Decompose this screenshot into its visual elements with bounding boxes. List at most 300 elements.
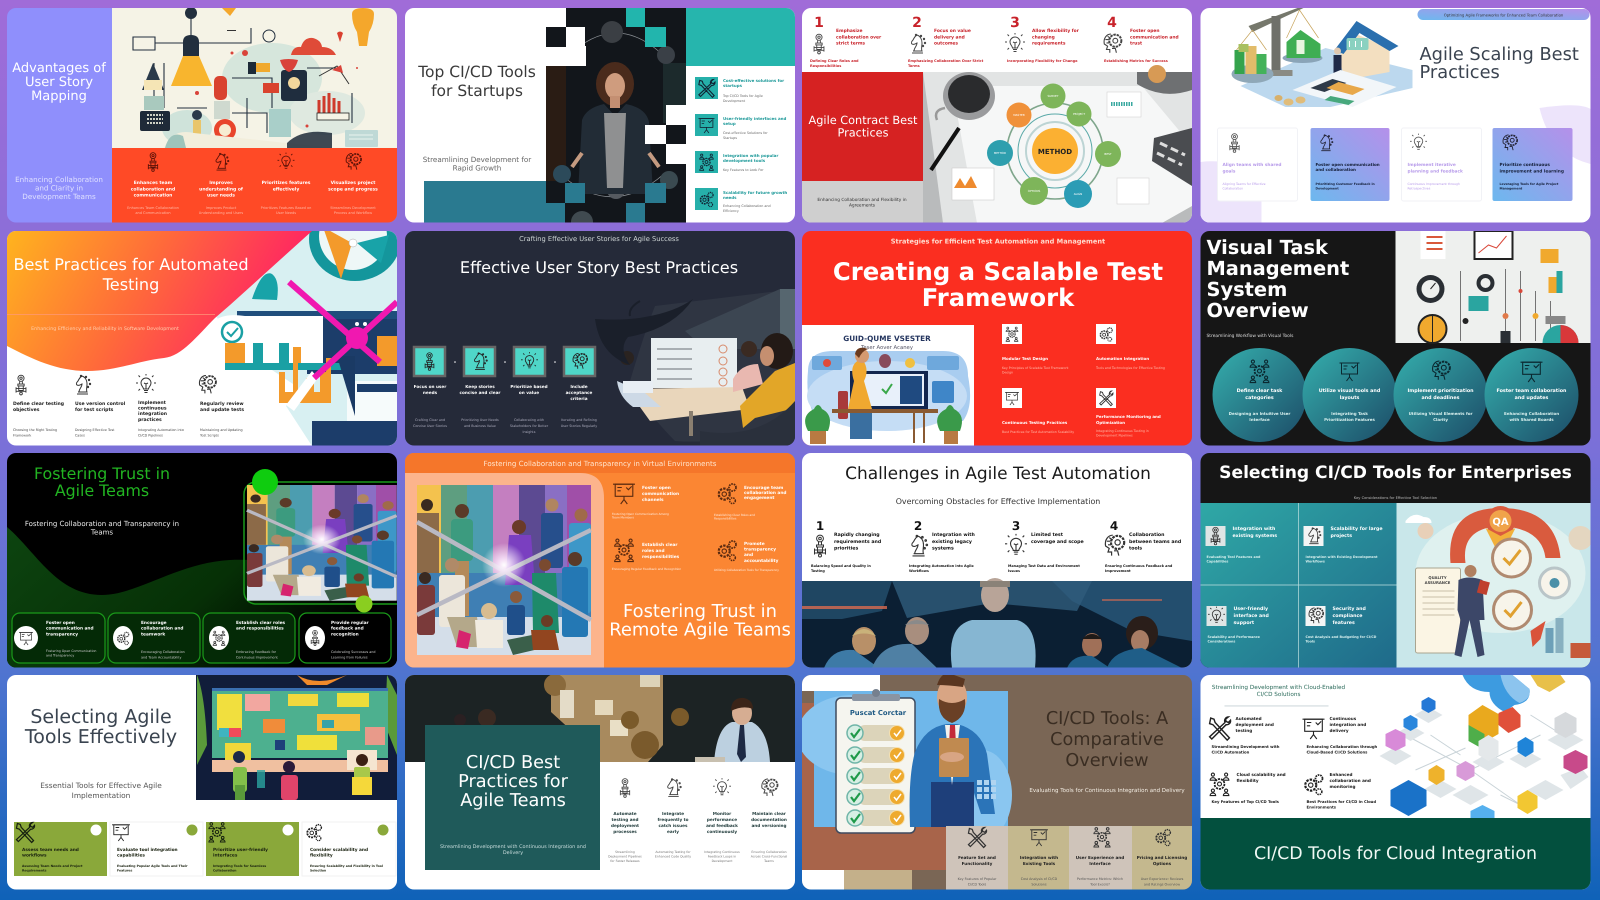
item 1	[695, 77, 784, 103]
item 4: Regularly review	[200, 401, 244, 407]
card 1: Requirements	[22, 868, 47, 872]
feature 4	[328, 153, 378, 215]
teal panel	[1200, 503, 1396, 668]
item 4	[199, 376, 244, 438]
feature 3: Best Practices for Test Automation Scalability	[1002, 430, 1074, 434]
item 3: Integration with popular	[723, 153, 778, 158]
feature 2: Understanding and Users	[199, 211, 243, 215]
item 1: Emphasize	[836, 28, 862, 34]
card 2	[1310, 128, 1390, 201]
circle 1: Define clear task	[1237, 388, 1283, 394]
feature 1: Design	[1002, 371, 1013, 375]
item 2	[695, 114, 787, 140]
step 1	[413, 347, 447, 428]
subtitle: Fostering Collaboration and Transparency in	[25, 520, 179, 528]
item 4: Enhanced	[1330, 772, 1352, 777]
card 1: communication and	[46, 626, 94, 632]
title: Overview	[1065, 751, 1149, 771]
item 3: 3	[1010, 15, 1020, 31]
column 4	[1132, 826, 1192, 890]
card 4	[302, 822, 396, 876]
item 1: Evaluating Tool Features and	[1206, 555, 1261, 559]
circle 2: Integrating Task	[1331, 411, 1368, 416]
feature 2: engagement	[744, 495, 774, 501]
item 1: 1	[816, 519, 824, 533]
title: Overview	[1206, 299, 1309, 322]
item 4: communication and	[1130, 34, 1179, 40]
slide: Top CI/CD Tools for Startups	[405, 8, 795, 233]
slide: Best Practices for Automated Testing	[7, 231, 397, 446]
feature 1	[1002, 324, 1069, 375]
feature 2	[714, 484, 786, 520]
step 3: Collaborating with	[514, 418, 544, 422]
item 3: Scalability and Performance	[1208, 635, 1261, 639]
item 4: needs	[723, 195, 737, 200]
item 2: systems	[932, 546, 954, 552]
item 3: Limited test	[1031, 532, 1064, 538]
item 3: practices	[138, 417, 162, 423]
column 1	[946, 826, 1008, 890]
step 1: Focus on user	[414, 384, 447, 389]
slide: Agile Contract Best Practices	[802, 8, 1192, 223]
subtitle: Teams	[90, 528, 113, 536]
photo: woman with network	[546, 8, 686, 233]
top text: Streamlining Development with Cloud-Enabled	[1212, 684, 1345, 691]
item 1: Capabilities	[1206, 560, 1228, 564]
item 2: Enhancing Collaboration through	[1306, 744, 1378, 749]
card 2: Encouraging Collaboration	[141, 650, 185, 654]
item 4	[1105, 519, 1181, 573]
card 4: flexibility	[310, 853, 333, 859]
feature 2: Encourage team	[744, 485, 784, 491]
photo: team with holographic screens	[802, 578, 1192, 668]
item 4: collaboration and	[1330, 778, 1371, 783]
step 2: Keep stories	[465, 384, 495, 389]
item 1: Testing	[811, 569, 825, 573]
card 3: Continuous Improvement through	[1408, 182, 1460, 186]
item 4	[695, 188, 787, 213]
gray subtitle panel	[802, 181, 923, 223]
circle 3: Clarity	[1433, 417, 1448, 422]
item 4: Scalability for future growth	[723, 190, 787, 195]
step 2: Prioritizing User Needs	[461, 418, 499, 422]
step 1: Concise User Stories	[413, 424, 447, 428]
item 1: testing and	[611, 817, 639, 822]
title: Selecting Agile	[30, 706, 172, 728]
item 4: documentation	[751, 817, 787, 822]
column 3	[1069, 826, 1132, 890]
card 1: Fostering Open Communication	[46, 649, 96, 653]
card 1: workflows	[22, 853, 47, 859]
item 2	[909, 519, 975, 573]
item 1: Defining Clear Roles and	[810, 59, 859, 63]
feature 3	[261, 153, 311, 215]
item 3	[1005, 15, 1080, 63]
photo frame with team	[244, 469, 414, 612]
item 1: Balancing Speed and Quality in	[811, 564, 871, 568]
card 3: Prioritize user-friendly	[213, 847, 268, 853]
item 2: 2	[912, 15, 922, 31]
subtitle pill: Optimizing Agile Frameworks for Enhanced Team Collaboration	[1444, 12, 1564, 18]
item 1	[608, 779, 642, 863]
top band	[405, 453, 795, 473]
item 3: 3	[1012, 519, 1020, 533]
card 2	[110, 822, 203, 876]
step 2	[460, 347, 501, 428]
circle 4	[1484, 348, 1578, 442]
title: Practices for	[458, 772, 569, 792]
item 3: Integrating Continuous	[704, 850, 740, 854]
slide: Selecting CI/CD Tools for Enterprises	[1200, 453, 1592, 668]
column 3: Interface	[1089, 861, 1111, 866]
feature 2: Automation Integration	[1096, 356, 1149, 361]
item 1: deployment	[611, 823, 639, 828]
feature 3: Prioritizes features	[262, 180, 311, 186]
illustration: dashboards with pink cross	[212, 197, 401, 446]
subtitle: Delivery	[503, 850, 523, 856]
item 3: Monitor	[713, 811, 732, 816]
item 1: strict terms	[836, 41, 865, 47]
step 3: on value	[519, 390, 539, 395]
subtitle: Development Teams	[22, 192, 96, 201]
item 2: 2	[914, 519, 922, 533]
item 1: processes	[613, 829, 637, 834]
card 4: Leveraging Tools for Agile Project	[1500, 182, 1559, 186]
step 1: needs	[423, 390, 438, 395]
item 2: for test scripts	[75, 407, 114, 413]
item 2: projects	[1330, 533, 1352, 539]
circle 4: Enhancing Collaboration	[1504, 411, 1559, 416]
feature 3: effectively	[273, 186, 299, 192]
item 4: and versioning	[751, 823, 787, 828]
item 3: continuous	[138, 406, 167, 412]
illustration: scales and house	[1232, 8, 1412, 107]
item 1: Responsibilities	[810, 64, 841, 68]
circle 1: categories	[1245, 395, 1274, 401]
feature 4: and	[744, 552, 753, 558]
card 2: Encourage	[141, 620, 167, 626]
item 4: between teams and	[1129, 539, 1181, 545]
item 1: Streamlining	[615, 850, 635, 854]
card 1: goals	[1222, 168, 1236, 174]
item 4: Foster open	[1130, 28, 1159, 34]
slide: Selecting Agile Tools Effectively	[7, 675, 397, 890]
column 4: User Experience: Reviews	[1141, 877, 1184, 881]
step 4: acceptance	[566, 390, 593, 395]
title: Effective User Story Best Practices	[460, 258, 738, 277]
item 3: Cloud scalability and	[1236, 772, 1286, 777]
item 1: collaboration over	[836, 34, 882, 40]
item 1: deployment and	[1236, 722, 1274, 727]
item 2: setup	[723, 121, 736, 126]
item 2: Integrate	[662, 811, 684, 816]
column 4: and Ratings Overview	[1144, 882, 1180, 886]
card 1: Assess team needs and	[22, 847, 79, 853]
feature 2	[199, 153, 243, 215]
item 4: Cost Analysis and Budgeting for CI/CD	[1306, 635, 1377, 639]
column 1: CI/CD Tools	[968, 882, 986, 886]
item 2: catch issues	[659, 823, 688, 828]
item 4: Maintain clear	[752, 811, 787, 816]
item 1	[810, 15, 882, 68]
item 3: Development	[712, 859, 733, 863]
card 3: interfaces	[213, 853, 238, 859]
title: Fostering Trust in	[34, 464, 170, 483]
title: Practices	[1420, 62, 1500, 83]
feature 4	[714, 541, 779, 572]
subtitle: Agreements	[849, 202, 876, 208]
card 3	[203, 613, 295, 663]
column 2: Solutions	[1031, 882, 1047, 886]
card 1: Align teams with shared	[1222, 162, 1281, 168]
subtitle: Streamlining Development with Continuous Integration and	[440, 844, 586, 850]
item 4: Establishing Metrics for Success	[1104, 59, 1168, 63]
item 4: 4	[1107, 15, 1117, 31]
green wave	[7, 527, 397, 668]
item 2: Cloud-Based CI/CD Solutions	[1306, 750, 1368, 754]
teal corner	[686, 8, 795, 66]
item 2: Emphasizing Collaboration Over Strict	[908, 59, 984, 63]
item 2: Terms	[908, 64, 920, 68]
title: Challenges in Agile Test Automation	[845, 464, 1151, 484]
feature 1: Modular Test Design	[1002, 356, 1048, 361]
top text: Fostering Collaboration and Transparency in Virtual Environments	[484, 459, 717, 468]
photo: method diagram on desk	[923, 65, 1192, 223]
title: Practices	[837, 126, 889, 140]
feature 2: user needs	[207, 193, 235, 199]
photo: team with gear sculpture	[405, 674, 795, 762]
item 2: Enhanced Code Quality	[655, 854, 691, 858]
feature 4: Streamlines Development	[330, 206, 376, 210]
illustration: tester at desk: GUID-QUME VSESTER	[843, 334, 931, 343]
illustration: tester at desk: Teser Aover Acaney	[860, 345, 913, 351]
illustration: tester at desk	[802, 325, 974, 446]
subtitle: and Clarity in	[35, 184, 83, 192]
card 1: Assessing Team Needs and Project	[22, 864, 83, 868]
item 4: Best Practices for CI/CD in Cloud	[1306, 799, 1376, 804]
item 4: Across Cross-Functional	[751, 854, 787, 858]
feature 4: Visualizes project	[331, 180, 376, 186]
subtitle: Overcoming Obstacles for Effective Implementation	[896, 497, 1100, 506]
step 3: Insights	[523, 430, 536, 434]
subtitle: Key Considerations for Effective Tool Selection	[1354, 496, 1437, 500]
item 2: Integration with	[932, 532, 975, 538]
item 2: frequently to	[657, 817, 689, 822]
slide: Advantages of User Story Mapping	[7, 7, 397, 223]
item 2: delivery	[1330, 728, 1349, 733]
item 2: User-friendly interfaces and	[723, 116, 787, 121]
top text: CI/CD Solutions	[1257, 691, 1300, 698]
item 3: integration	[138, 411, 167, 417]
gradient wave shape	[7, 231, 312, 371]
card 1: Foster open	[46, 620, 75, 626]
top text: Crafting Effective User Stories for Agile Success	[519, 235, 679, 243]
card 3: Continuous Improvement	[236, 656, 279, 660]
column 3: Tool Excels?	[1089, 882, 1110, 886]
divider	[1224, 704, 1328, 707]
column 3: User Experience and	[1076, 855, 1124, 860]
item 3: Implement	[138, 400, 167, 406]
slide: Fostering Trust in Agile Teams	[7, 453, 414, 668]
item 4	[751, 779, 787, 863]
slide: Challenges in Agile Test Automation	[802, 453, 1192, 668]
card 4: Provide regular	[331, 620, 370, 626]
slide: CI/CD Best Practices for Agile Teams	[405, 674, 795, 890]
subtitle: Implementation	[72, 791, 131, 800]
illustration: machine collage	[112, 7, 397, 148]
feature 1: Foster open	[642, 485, 671, 491]
item 3: support	[1234, 620, 1255, 626]
item 2: Designing Effective Test	[75, 428, 115, 432]
subtitle: Evaluating Tools for Continuous Integration and Delivery	[1029, 787, 1185, 794]
item 3: performance	[707, 817, 737, 822]
step 4	[561, 347, 597, 428]
feature 2: Responsibilities	[714, 516, 737, 520]
photo: method diagram on desk: ALIGN	[1074, 192, 1082, 196]
card 2: Prioritizing Customer Feedback in	[1316, 182, 1375, 186]
item 3: interface and	[1234, 613, 1269, 619]
feature 1: communication	[642, 491, 679, 497]
item 4: Security and	[1332, 606, 1366, 612]
illustration: man with checklist	[797, 673, 1012, 840]
item 1	[811, 519, 881, 573]
feature 2: Improves	[209, 180, 233, 186]
item 4: tools	[1129, 546, 1142, 552]
card 4: Celebrating Successes and	[331, 650, 375, 654]
card 1	[14, 822, 107, 876]
title: Management	[1206, 257, 1349, 280]
feature 4: Process and Workflow	[334, 211, 372, 215]
feature 1: Enhances Team Collaboration	[127, 206, 179, 210]
card 3: and responsibilities	[236, 626, 284, 632]
circle 2	[1302, 348, 1396, 442]
item 4: Environments	[1306, 804, 1337, 810]
item 4: monitoring	[1330, 784, 1356, 789]
feature 2	[1095, 324, 1165, 370]
item 2: existing legacy	[932, 539, 972, 545]
circle 1	[1212, 348, 1306, 442]
item 1: objectives	[13, 407, 40, 413]
feature 2: Improves Product	[206, 206, 237, 210]
card 3	[1402, 128, 1482, 201]
item 2	[1304, 526, 1383, 564]
item 1: Cost-effective solutions for	[723, 78, 784, 83]
card 4: Learning from Failures	[331, 656, 368, 660]
card 3: Integrating Tools for Seamless	[213, 864, 266, 868]
title: CI/CD Tools for Cloud Integration	[1254, 844, 1537, 864]
item 3: and feedback	[706, 823, 738, 828]
peach panel	[405, 473, 604, 668]
item 1: Automated	[1236, 716, 1262, 721]
item 3: Key Features to Look For	[723, 168, 764, 172]
feature 3: Prioritizes Features Based on	[261, 206, 311, 210]
photo: method diagram on desk: PROJECT	[1073, 112, 1085, 116]
slide: Agile Scaling Best Practices	[1200, 8, 1590, 223]
card 2: collaboration and	[141, 626, 183, 632]
card 2: Evaluate tool integration	[117, 847, 178, 853]
feature 3: Continuous Testing Practices	[1002, 420, 1068, 425]
step 3: Prioritize based	[510, 384, 548, 389]
top text: Strategies for Efficient Test Automation and Management	[891, 238, 1105, 246]
feature 4: Integrating Continuous Testing in	[1096, 429, 1149, 433]
step 4: Include	[570, 384, 588, 389]
item 1: requirements and	[834, 539, 881, 545]
circle 2: Prioritization Features	[1324, 417, 1375, 422]
title: Framework	[922, 283, 1075, 312]
feature 1	[127, 153, 179, 215]
card 4: Management	[1500, 186, 1523, 190]
item 3	[695, 151, 778, 173]
card 1: transparency	[46, 631, 78, 637]
item 1: for Faster Releases	[610, 859, 640, 863]
item 1	[1210, 716, 1280, 754]
item 3	[1206, 606, 1269, 644]
item 3: requirements	[1032, 41, 1066, 47]
card 3: Collaboration	[213, 868, 236, 872]
item 4: Test Scripts	[199, 434, 219, 438]
feature 4: Development Pipelines	[1096, 434, 1133, 438]
feature 3	[1002, 388, 1074, 434]
item 3	[1210, 772, 1286, 804]
photo: method diagram on desk: BEST	[1104, 152, 1112, 156]
feature 2: understanding of	[199, 186, 243, 192]
subtitle: Essential Tools for Effective Agile	[40, 781, 162, 790]
feature 1: Key Principles of Scalable Test Framework	[1002, 366, 1069, 370]
divider and subtitle: Enhancing Efficiency and Reliability in Software Development	[31, 326, 179, 332]
circle 3: Utilizing Visual Elements for	[1409, 411, 1472, 416]
teal title panel	[425, 725, 600, 870]
title: Testing	[102, 275, 159, 294]
card 3: Retrospectives	[1408, 186, 1431, 190]
item 4: 4	[1110, 519, 1118, 533]
item 4: Efficiency	[723, 209, 739, 213]
item 4: Improvement	[1105, 569, 1131, 573]
slide: Effective User Story Best Practices	[405, 231, 795, 446]
card 3	[206, 822, 299, 876]
feature 4	[1096, 388, 1161, 438]
subtitle pill	[1418, 9, 1590, 20]
column 2: Existing Tools	[1023, 861, 1056, 866]
item 3: coverage and scope	[1031, 539, 1084, 545]
item 4	[1104, 15, 1179, 63]
feature 1: channels	[642, 497, 664, 503]
item 3: changing	[1032, 34, 1055, 40]
card 1: Collaboration	[1222, 186, 1243, 190]
item 1: Choosing the Right Testing	[13, 428, 57, 432]
item 1: Top CI/CD Tools for Agile	[722, 94, 763, 98]
title: Agile Teams	[55, 481, 149, 500]
slide: CI/CD Tools: A Comparative Overview	[797, 673, 1192, 890]
item 1: Automate	[613, 811, 637, 816]
subtitle: Enhancing Collaboration	[15, 175, 103, 184]
circle 2: layouts	[1340, 395, 1359, 401]
item 2: Cases	[75, 434, 85, 438]
illustration: quality assurance	[1396, 503, 1592, 668]
item 3	[704, 778, 740, 863]
card 4: feedback and	[331, 626, 364, 632]
photo: method diagram on desk: OPTIONS	[1028, 189, 1040, 193]
item 2: outcomes	[934, 41, 958, 47]
card 4: recognition	[331, 631, 359, 637]
photo: method diagram on desk: SURVEY	[1047, 94, 1059, 98]
item 2: Workflows	[909, 569, 929, 573]
item 1: Define clear testing	[13, 401, 64, 407]
item 4: Tools	[1306, 640, 1315, 644]
card 1	[1218, 128, 1298, 201]
card 4: Prioritize continuous	[1500, 162, 1550, 168]
card 4: improvement and learning	[1500, 168, 1564, 174]
subtitle: Streamlining Workflow with Visual Tools	[1206, 333, 1294, 339]
